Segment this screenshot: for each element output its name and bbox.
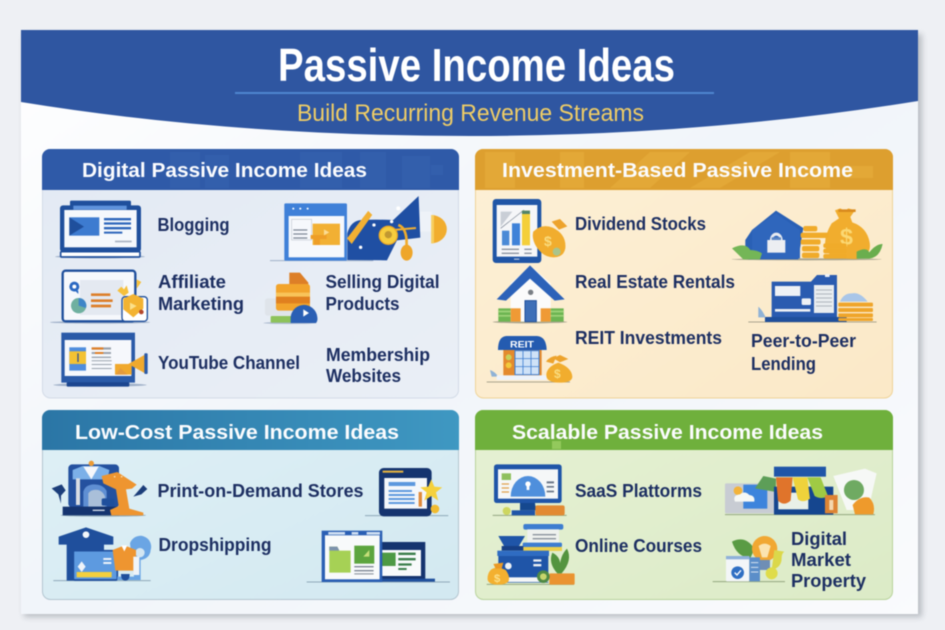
label: selling digital products: [326, 272, 440, 314]
panel: low-cost passive income ideas: [42, 410, 459, 600]
icon: dividend stocks tablet: [493, 199, 567, 263]
label: affiliate marketing: Marketing: [158, 294, 244, 314]
label: SaaS platforms: SaaS Plattorms: [575, 481, 702, 501]
label: dropshipping: Dropshipping: [158, 535, 272, 555]
label: peer-to-peer lending: Lending: [751, 354, 816, 374]
label: youtube channel: YouTube Channel: [158, 353, 300, 373]
label: digital market property: Property: [791, 571, 866, 591]
icon: browser and coins: [270, 196, 447, 261]
label: affiliate marketing: [158, 272, 244, 314]
icon: blogging monitor: [55, 201, 145, 258]
heading: Investment-Based Passive Income: [502, 159, 853, 182]
label: digital market property: Digital: [791, 529, 847, 549]
heading: Digital Passive Income Ideas: [82, 159, 367, 182]
label: membership websites: Websites: [326, 366, 401, 386]
label: peer-to-peer lending: Peer-to-Peer: [751, 331, 856, 351]
label: online courses: Online Courses: [575, 536, 702, 556]
icon: REIT building: $: [554, 367, 561, 381]
panel: scalable passive income ideas: [475, 410, 893, 600]
icon: browser windows and laptop: [307, 531, 450, 582]
icon: house lock and money bag: [732, 208, 883, 260]
subtitle: Build Recurring Revenue Streams: [297, 100, 644, 127]
icon: selling digital products: [263, 273, 317, 324]
header banner: [21, 30, 918, 136]
panel: investment-based passive income: [475, 149, 893, 398]
icon: online courses books: $: [494, 573, 501, 585]
icon: dividend stocks tablet: $: [544, 233, 552, 249]
icon: dropshipping warehouse: [53, 527, 151, 581]
label: print-on-demand stores: Print-on-Demand Stores: [158, 481, 364, 501]
icon: real estate house: [493, 265, 567, 323]
label: blogging: Blogging: [158, 215, 230, 235]
label: digital market property: [791, 529, 866, 591]
icon: youtube channel screen with megaphone: [53, 333, 148, 387]
icon: REIT building: [487, 336, 572, 383]
icon: SaaS monitor: [493, 464, 567, 515]
icon: REIT building: REIT: [510, 339, 534, 349]
heading: Scalable Passive Income Ideas: [512, 421, 823, 444]
icon: peer-to-peer lending screen: [748, 274, 877, 322]
icon: online storefront with awning: [725, 467, 877, 515]
label: peer-to-peer lending: [751, 331, 856, 374]
icon: print-on-demand t-shirt and printer: [52, 461, 147, 517]
label: REIT investments: REIT Investments: [575, 328, 722, 348]
label: affiliate marketing: Affiliate: [158, 272, 226, 292]
label: membership websites: [326, 345, 430, 386]
icon: digital property with light bulb: [713, 536, 785, 582]
label: real estate rentals: Real Estate Rentals: [575, 272, 735, 292]
icon: affiliate marketing laptop: [50, 271, 150, 324]
panel: digital passive income ideas: [42, 149, 459, 398]
heading: Low-Cost Passive Income Ideas: [75, 421, 399, 444]
label: selling digital products: Selling Digital: [326, 272, 440, 292]
label: selling digital products: Products: [326, 294, 400, 314]
icon: house lock and money bag: $: [840, 224, 853, 250]
label: membership websites: Membership: [326, 345, 430, 365]
title: Passive Income Ideas: [278, 39, 675, 91]
label: digital market property: Market: [791, 550, 851, 570]
icon: online courses books: [487, 524, 575, 585]
label: dividend stocks: Dividend Stocks: [575, 214, 706, 234]
icon: online store tablet with star: [365, 468, 448, 516]
